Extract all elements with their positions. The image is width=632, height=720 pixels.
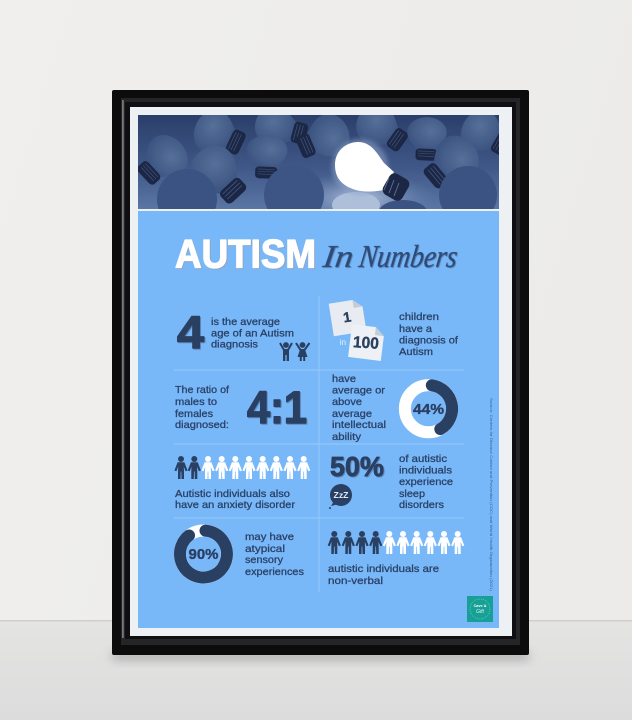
pictogram: 4 of 10 people xyxy=(328,531,464,554)
age description: diagnosis xyxy=(211,338,258,350)
pictogram: 2 of 10 people xyxy=(174,456,310,479)
title xyxy=(175,232,460,276)
floor xyxy=(0,621,632,720)
ratio 4:1: 4:1 xyxy=(247,382,307,433)
icon: paper with 100: 100 xyxy=(352,334,380,353)
donut chart 44%: 44% xyxy=(413,401,444,418)
logo badge: Cave & xyxy=(474,604,487,608)
number 50%: 50% xyxy=(330,451,384,482)
stat: non-verbal xyxy=(328,531,464,587)
stat: intellectual ability 44% xyxy=(332,373,452,443)
ability description: have xyxy=(332,373,356,385)
children description: have a xyxy=(399,323,432,335)
sleep description: disorders xyxy=(399,499,444,511)
age description: age of an Autism xyxy=(211,328,294,340)
sensory description: sensory xyxy=(245,554,284,566)
stat: male to female ratio xyxy=(175,382,307,433)
stat: 1 in 100 children xyxy=(329,299,458,361)
sensory description: may have xyxy=(245,531,294,543)
ability description: average xyxy=(332,408,372,420)
sleep description: of autistic xyxy=(399,453,447,465)
donut chart 90%: 90% xyxy=(188,546,218,563)
sensory description: atypical xyxy=(245,543,285,555)
blue poster panel xyxy=(138,211,499,628)
stat: average age of diagnosis xyxy=(177,307,310,361)
icon: glowing bulb xyxy=(332,139,412,203)
ability description: intellectual xyxy=(332,419,386,431)
children description: Autism xyxy=(399,346,433,358)
sleep description: experience xyxy=(399,476,453,488)
source note: Source: Centers for Disease Control and Prevention (CDC) and World Health Organization (2021) xyxy=(489,398,493,591)
logo badge: Gift xyxy=(476,609,484,615)
photo: field of light bulbs xyxy=(138,115,499,209)
ability description: above xyxy=(332,396,362,408)
ratio description: diagnosed: xyxy=(175,419,229,431)
ability description: average or xyxy=(332,384,386,396)
ability description: ability xyxy=(332,431,362,443)
anxiety description: have an anxiety disorder xyxy=(175,499,296,511)
non-verbal description: non-verbal xyxy=(328,575,383,587)
frame shadow xyxy=(112,652,529,660)
icon: two children xyxy=(280,342,310,361)
icon: sleep speech bubble: ZzZ xyxy=(334,491,349,500)
title word: AUTISM: AUTISM xyxy=(175,232,316,276)
logo badge xyxy=(467,596,493,622)
number 4: 4 xyxy=(177,307,204,358)
children description: children xyxy=(399,311,439,323)
sensory description: experiences xyxy=(245,566,304,578)
ratio description: females xyxy=(175,408,213,420)
sleep description: sleep xyxy=(399,488,425,500)
title word: In: In xyxy=(320,239,356,274)
wall and floor junction xyxy=(0,620,632,622)
stat: sensory experiences 90% xyxy=(180,530,304,578)
title word: Numbers: Numbers xyxy=(356,239,460,274)
stat: sleep disorders 50% xyxy=(329,451,453,511)
ratio description: males to xyxy=(175,396,217,408)
grid dividers xyxy=(174,296,464,592)
icon: paper with 1: 1 xyxy=(342,308,352,326)
anxiety description: Autistic individuals also xyxy=(175,488,290,500)
picture frame xyxy=(112,90,529,655)
non-verbal description: autistic individuals are xyxy=(328,563,439,575)
word: in: in xyxy=(340,337,346,347)
children description: diagnosis of xyxy=(399,334,458,346)
age description: is the average xyxy=(211,316,280,328)
stat: anxiety disorder xyxy=(174,456,310,511)
sleep description: individuals xyxy=(399,464,452,476)
ratio description: The ratio of xyxy=(175,384,229,396)
